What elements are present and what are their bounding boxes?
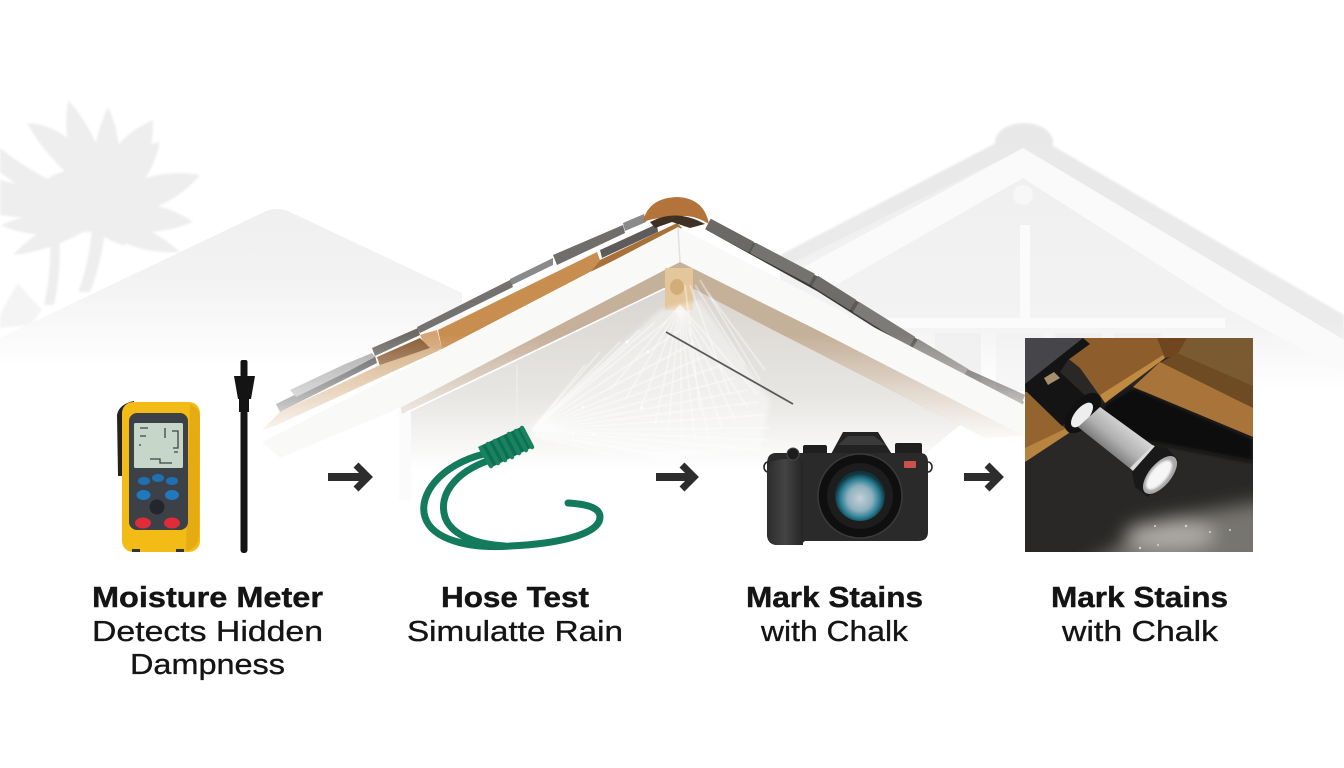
wood beam lower left	[1025, 392, 1067, 462]
shingle blocks left	[290, 214, 658, 397]
wood pocket	[377, 338, 430, 366]
label: mark stains (flashlight)	[1051, 582, 1228, 648]
right house windows	[935, 333, 1161, 391]
meter screen	[134, 423, 183, 468]
background: right house silhouette	[780, 123, 1344, 392]
right house gable wall	[780, 150, 1344, 392]
label: hose test: Hose Test	[441, 582, 589, 614]
wood log	[438, 252, 600, 349]
label: moisture meter: Detects Hidden	[92, 616, 323, 648]
dark cavity	[1090, 387, 1253, 462]
flashlight bracket	[1025, 338, 1090, 426]
wood beam right	[1177, 338, 1253, 388]
label: moisture meter	[92, 582, 323, 681]
label: mark stains (camera): with Chalk	[760, 616, 909, 648]
ridge cap	[643, 197, 709, 224]
camera lens	[818, 454, 902, 538]
wall seam	[516, 365, 518, 450]
hose inner strand	[443, 460, 505, 546]
shingle band right	[708, 224, 1023, 404]
fascia apex seam	[678, 228, 680, 262]
meter face	[129, 413, 188, 530]
tool 1: moisture meter	[117, 401, 200, 552]
main roof cross-section	[262, 197, 1025, 448]
wood notch	[420, 330, 442, 352]
label: hose test	[407, 582, 623, 648]
bracket inset	[1044, 372, 1060, 385]
background: palm tree silhouette	[0, 100, 200, 328]
arrow 2	[656, 465, 694, 489]
photo floor	[1025, 338, 1253, 552]
label: mark stains (flashlight): Mark Stains	[1051, 582, 1228, 614]
white fascia	[262, 227, 1024, 458]
arrow 3	[964, 465, 999, 489]
right house white fascia	[802, 148, 1344, 372]
tool 4: flashlight photo	[1025, 338, 1253, 552]
camera grip	[767, 459, 803, 545]
wood strip under shingles	[590, 223, 682, 272]
meter bumper	[117, 401, 134, 476]
label: moisture meter: Dampness	[130, 649, 285, 681]
camera body	[767, 453, 928, 545]
camera hump	[830, 432, 893, 456]
label: mark stains (flashlight): with Chalk	[1061, 616, 1219, 648]
water spray fan	[532, 280, 770, 458]
wood beam diagonal	[1069, 338, 1172, 403]
grey corner	[1025, 338, 1083, 385]
right house post and beam	[870, 225, 1225, 328]
label: moisture meter: Moisture Meter	[92, 582, 323, 614]
tool 3: camera	[764, 432, 932, 545]
tan wood left	[262, 348, 440, 430]
meter feet	[132, 549, 184, 552]
flashlight barrel	[1078, 407, 1155, 470]
camera strap lugs	[764, 462, 932, 472]
white corner post	[399, 410, 411, 500]
dark underlay left	[276, 356, 377, 412]
arrow 1	[328, 465, 368, 489]
meter buttons	[135, 474, 180, 528]
floor specks	[1139, 525, 1231, 549]
background: left house silhouette	[0, 209, 462, 375]
hose coil nozzle	[478, 426, 533, 468]
camera knob	[787, 448, 799, 460]
label: mark stains (camera)	[746, 582, 923, 648]
flashlight head	[1132, 446, 1178, 497]
camera badge	[904, 461, 916, 468]
wall under the roof	[410, 282, 960, 475]
meter body	[122, 402, 200, 552]
tool 1: probe	[234, 360, 255, 553]
tool 2: garden hose	[424, 426, 600, 547]
label: hose test: Simulatte Rain	[407, 616, 623, 648]
flashlight collar	[1064, 392, 1102, 434]
floor light pool	[1090, 492, 1253, 552]
wood block	[665, 268, 693, 310]
right house vent	[1013, 185, 1033, 205]
camera dials	[803, 445, 827, 457]
barrel ring	[1130, 445, 1155, 471]
probe rod in spray	[666, 332, 793, 404]
label: mark stains (camera): Mark Stains	[746, 582, 923, 614]
hose outer strand	[424, 454, 600, 547]
tan soffit	[400, 258, 1024, 438]
ridge cap shadow	[650, 215, 705, 228]
right house roof band	[780, 123, 1344, 345]
